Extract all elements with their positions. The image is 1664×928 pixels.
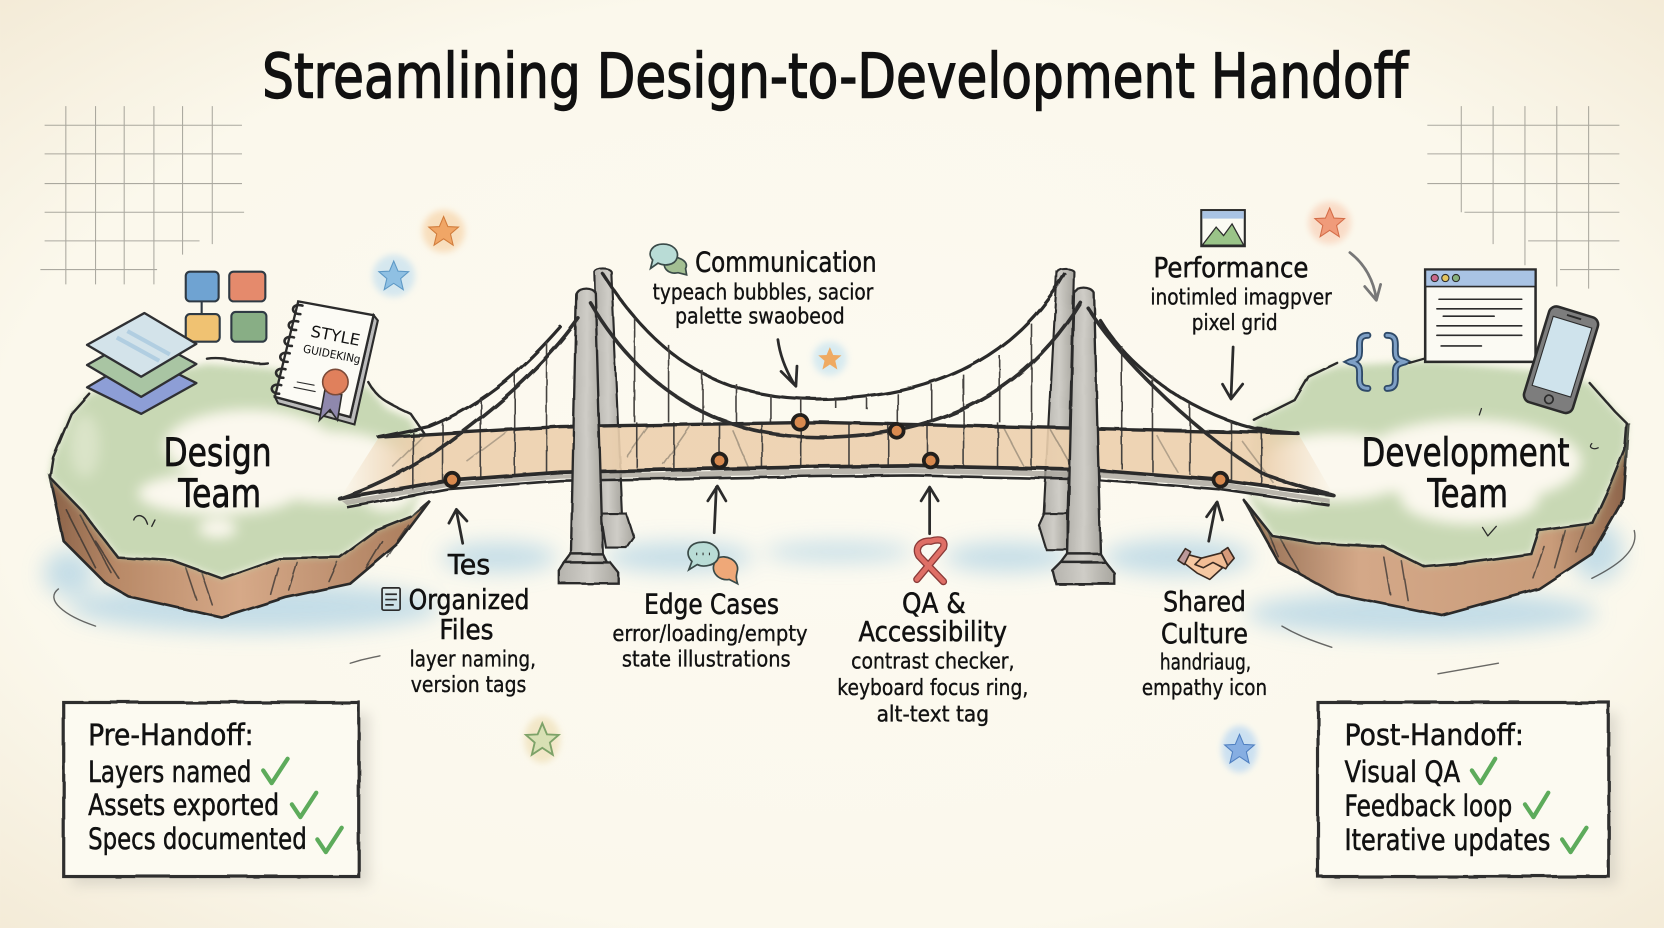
island outline (50, 358, 425, 578)
decorative stars (373, 202, 1351, 773)
island: design team (50, 358, 430, 663)
bridge deck (340, 422, 1334, 499)
label: communication (650, 244, 877, 330)
hangers (393, 318, 1273, 490)
label: organized files: Tes (447, 548, 490, 581)
star: blue (373, 255, 415, 297)
island outline (1244, 363, 1627, 567)
label: shared culture: Shared (1163, 585, 1246, 618)
arrow: organized files (449, 509, 467, 543)
panel: pre-handoff checklist: Specs documented (88, 822, 307, 857)
label: edge cases: state illustrations (622, 646, 791, 672)
label: performance: Performance (1154, 251, 1308, 284)
checkmarks (1472, 759, 1586, 852)
icon: style guideline notebook: GUIDEKINg (302, 342, 362, 366)
label: qa and accessibility: alt-text tag (877, 702, 989, 728)
water (44, 522, 1623, 637)
connection nodes (445, 415, 1227, 487)
team label: development team (1362, 431, 1570, 517)
panel: post-handoff checklist: Visual QA (1345, 755, 1461, 790)
label: performance: inotimled imagpver (1150, 285, 1333, 311)
star: orange (422, 210, 465, 253)
team label: design team (163, 431, 272, 517)
back cables (379, 274, 1298, 437)
icon: file (382, 588, 400, 610)
suspension bridge (340, 268, 1334, 584)
label: organized files (382, 548, 536, 698)
label: edge cases (612, 542, 808, 672)
deck rails (340, 422, 1334, 507)
arrow: communication (778, 340, 797, 386)
checkmarks (263, 759, 342, 852)
island grass (1244, 355, 1627, 567)
star: green (524, 716, 560, 763)
panel: post-handoff checklist (1318, 702, 1617, 885)
arrow: edge cases (708, 486, 726, 533)
label: qa and accessibility (837, 540, 1028, 728)
back towers (594, 268, 1074, 550)
island grass (50, 359, 429, 578)
icon: orange and teal bubbles (688, 542, 738, 584)
arrows (449, 253, 1381, 543)
panel: post-handoff checklist: Iterative updates (1345, 823, 1550, 858)
panel: post-handoff checklist: Feedback loop (1345, 789, 1512, 824)
label: shared culture (1142, 548, 1267, 701)
icon: style guideline notebook (272, 301, 378, 424)
label: organized files: Files (439, 613, 493, 646)
icon: style guideline notebook: STYLE (309, 322, 362, 350)
icon: colour swatches (186, 272, 266, 342)
label: qa and accessibility: Accessibility (859, 615, 1007, 648)
island cliff (1244, 423, 1629, 615)
label: communication: Communication (695, 246, 877, 279)
arrow: shared culture (1207, 502, 1223, 541)
icon: optimised image (1201, 210, 1245, 246)
team label: design team: Design (163, 431, 272, 476)
front towers (559, 288, 1114, 584)
star: red-orange (1308, 202, 1351, 244)
label: shared culture: handriaug, (1160, 650, 1251, 676)
water ripples (1282, 531, 1635, 674)
label: edge cases: Edge Cases (644, 587, 779, 620)
icon: phone (1522, 305, 1600, 415)
island cliff (50, 478, 430, 618)
deck underside (342, 468, 1330, 505)
label: shared culture: empathy icon (1142, 675, 1267, 701)
label: performance: pixel grid (1192, 310, 1278, 336)
label: organized files: layer naming, (410, 646, 536, 672)
icon: accessibility ribbon (917, 540, 944, 582)
grid: left corner (40, 106, 244, 284)
icon: layer stack (87, 313, 196, 414)
label: communication: palette swaobeod (675, 304, 845, 330)
front cables (340, 302, 1334, 499)
panel: pre-handoff checklist: Pre-Handoff: (88, 718, 254, 753)
label: qa and accessibility: QA & (902, 586, 966, 619)
icon: handshake (1178, 548, 1234, 579)
label: qa and accessibility: contrast checker, (851, 649, 1015, 675)
grid: right corner (1427, 106, 1619, 289)
title: Streamlining Design-to-Development Handoff (262, 41, 1410, 113)
panel: pre-handoff checklist: Layers named (88, 755, 252, 790)
label: edge cases: error/loading/empty (612, 621, 808, 647)
team label: development team: Development (1362, 431, 1570, 476)
star: small orange (813, 342, 847, 376)
star: lower blue (1221, 726, 1258, 773)
label: organized files: version tags (411, 672, 526, 698)
team label: development team: Team (1427, 472, 1508, 517)
label: organized files: Organized (409, 583, 530, 616)
panel: pre-handoff checklist: Assets exported (88, 788, 279, 823)
island: development team (1244, 355, 1635, 674)
water ripples (54, 589, 380, 663)
icon: chat bubbles (650, 244, 687, 275)
label: shared culture: Culture (1161, 617, 1248, 650)
grass tuft (134, 516, 155, 526)
arrow: grey star (1350, 253, 1381, 300)
arrow: qa (921, 487, 938, 534)
label: performance (1150, 210, 1333, 336)
label: communication: typeach bubbles, sacior (653, 279, 874, 305)
team label: design team: Team (178, 472, 261, 517)
arrow: performance (1223, 347, 1243, 399)
icon: code braces (1350, 335, 1405, 388)
panel: pre-handoff checklist (64, 702, 369, 885)
label: qa and accessibility: keyboard focus ring, (837, 675, 1028, 701)
grass tuft (1479, 409, 1598, 536)
panel: post-handoff checklist: Post-Handoff: (1345, 718, 1524, 753)
icon: browser window (1409, 270, 1536, 363)
